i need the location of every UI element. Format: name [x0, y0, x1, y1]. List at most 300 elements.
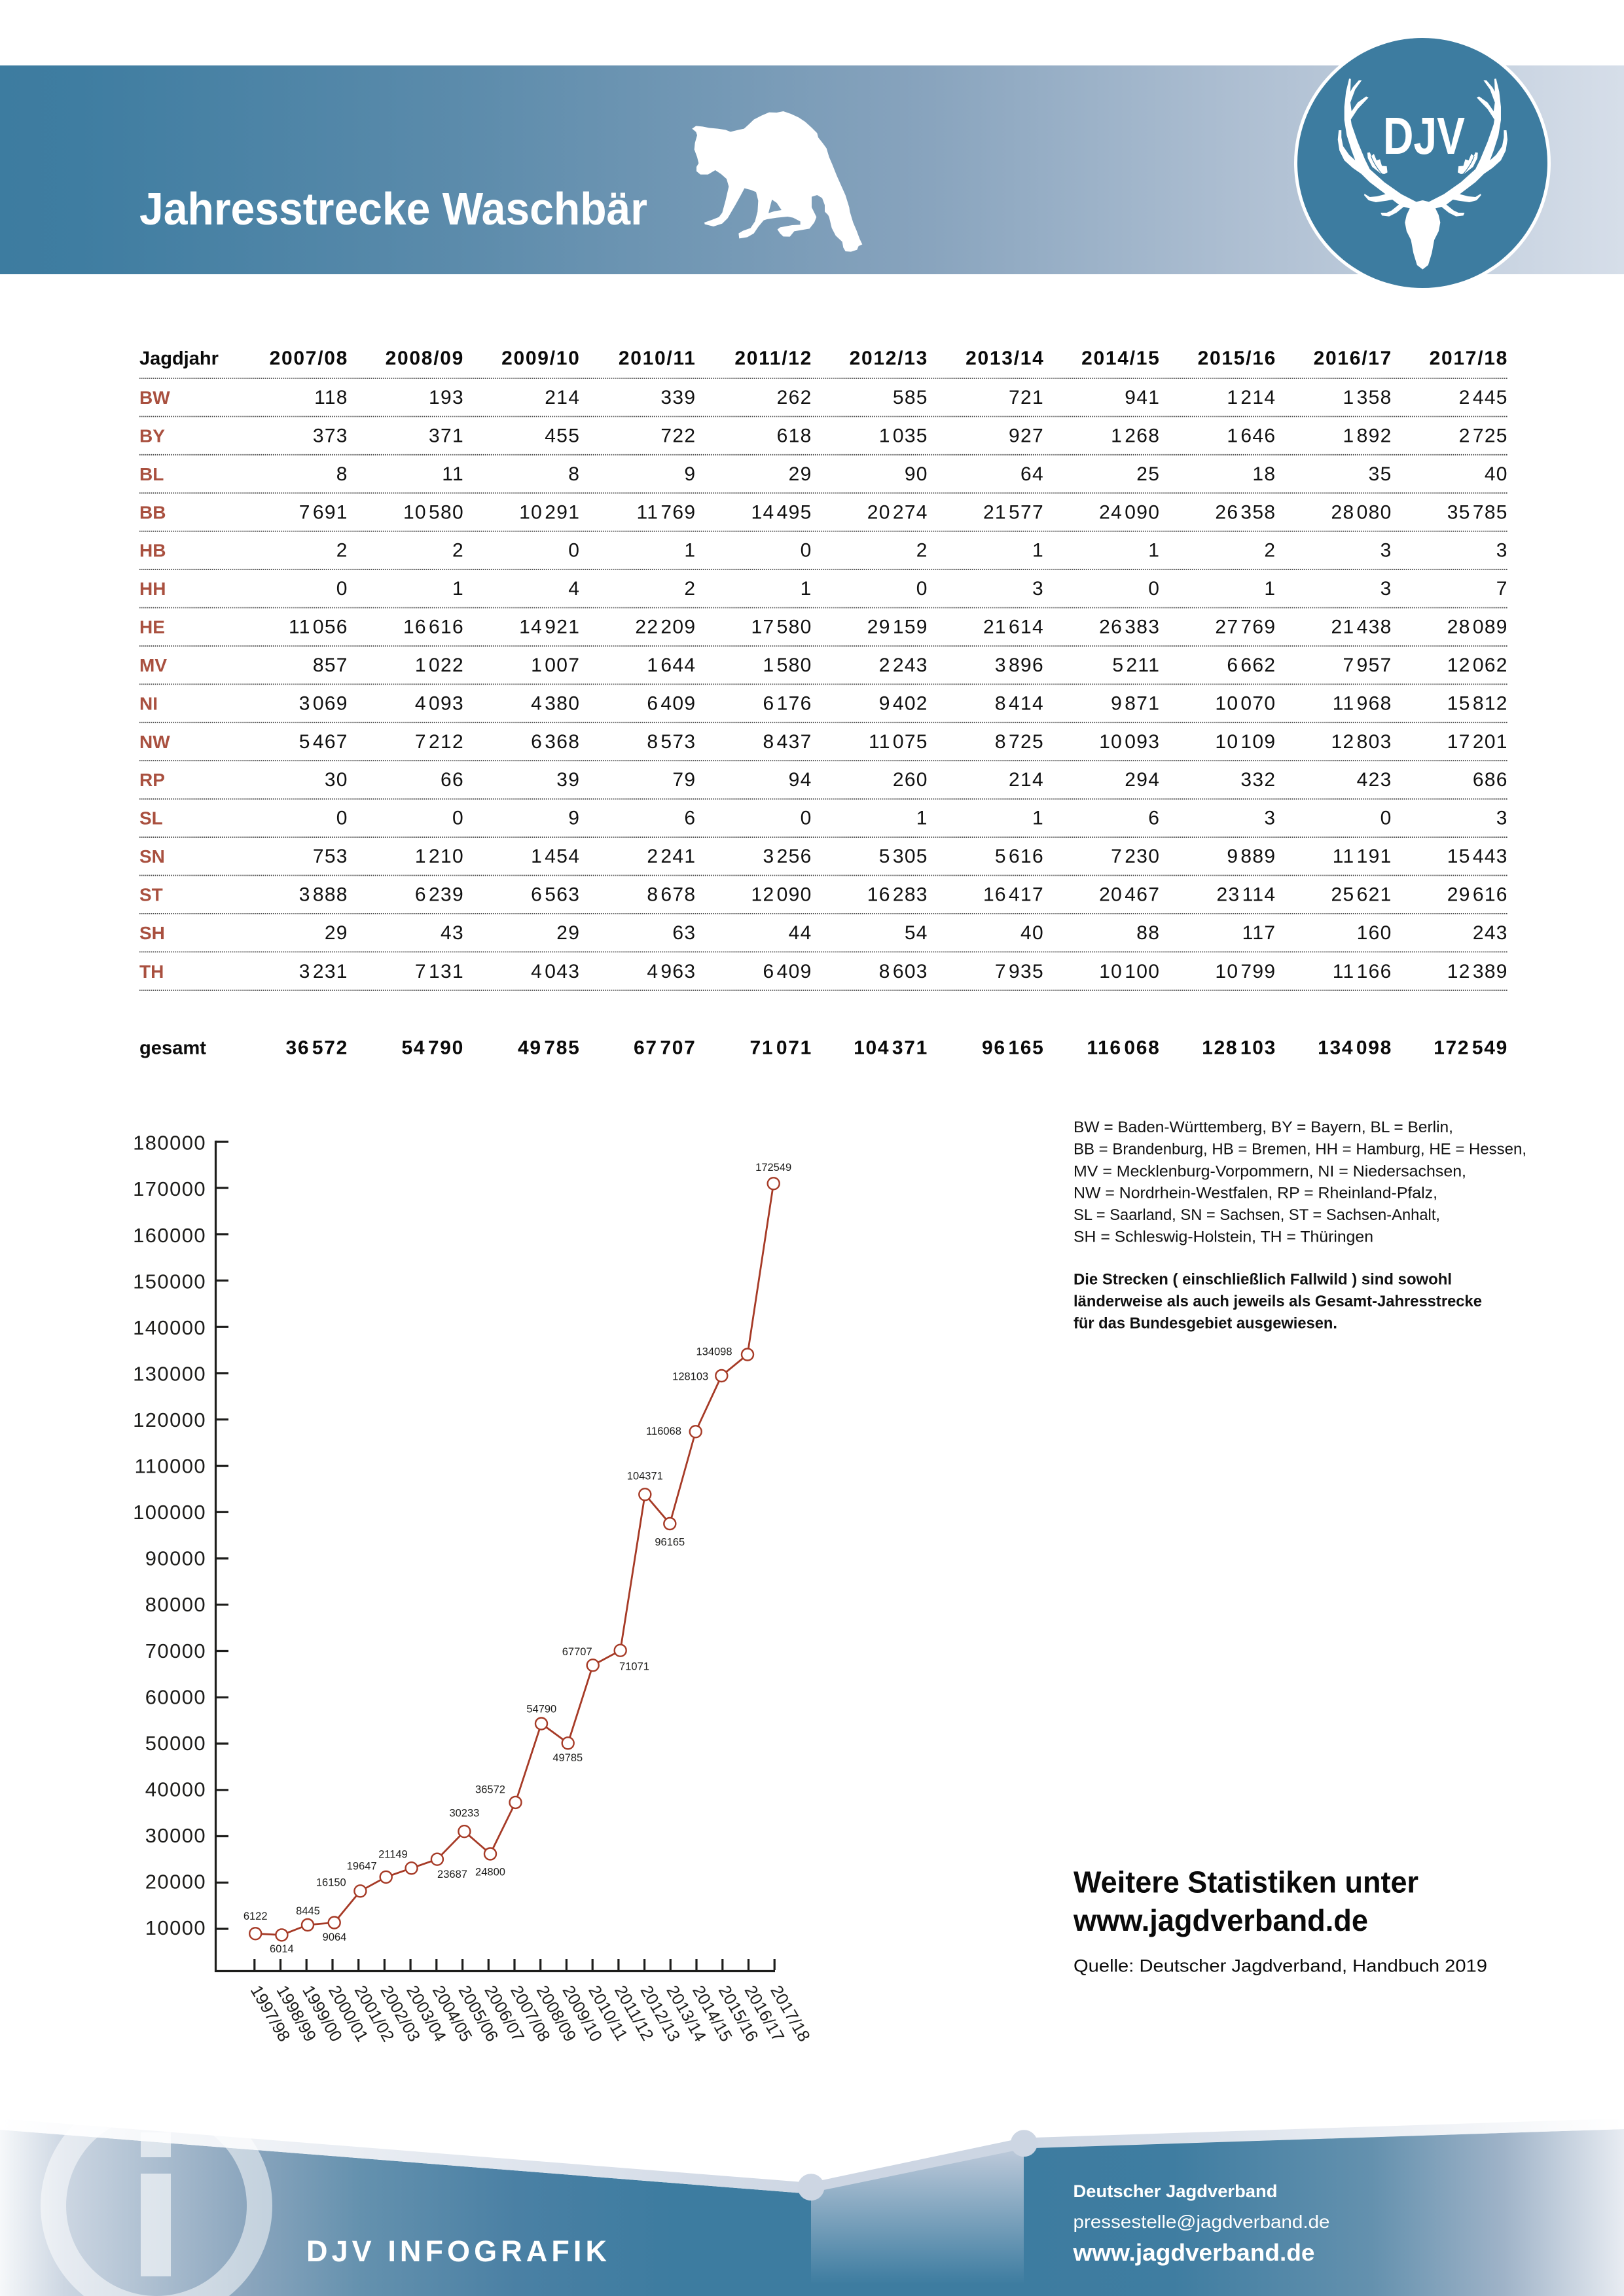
- x axis labels: 2014/15: [689, 1982, 736, 2045]
- contact block: Deutscher Jagdverband: [1074, 2181, 1278, 2201]
- x axis labels: 2011/12: [611, 1982, 658, 2044]
- row BY: BY: [139, 425, 165, 446]
- icon: right antler and head half: [1421, 79, 1507, 270]
- abbreviation legend: BB = Brandenburg, HB = Bremen, HH = Hamburg, HE = Hessen,: [1074, 1140, 1526, 1158]
- row BY: 1 646: [1227, 425, 1276, 446]
- table header row: 2009/10: [501, 348, 580, 369]
- row BY: 455: [545, 425, 580, 446]
- row BW: 262: [777, 387, 812, 408]
- row RP: [139, 769, 1508, 791]
- row NI: 6 176: [763, 692, 812, 714]
- row BB: 24 090: [1099, 501, 1160, 523]
- row MV: 1 007: [531, 655, 580, 676]
- data point value labels: 16150: [316, 1876, 346, 1888]
- abbreviation legend: SH = Schleswig-Holstein, TH = Thüringen: [1074, 1229, 1373, 1246]
- row NI: 6 409: [647, 692, 696, 714]
- table header row: 2008/09: [386, 348, 464, 369]
- row SH: 29: [325, 922, 348, 944]
- data point value labels: 96165: [655, 1536, 685, 1548]
- row TH: 10 100: [1099, 961, 1160, 982]
- y axis labels: 110000: [134, 1455, 206, 1478]
- row HE: 27 769: [1215, 617, 1276, 637]
- row HE: 11 056: [289, 617, 348, 637]
- row HB: [139, 540, 1508, 562]
- row ST: 6 563: [531, 884, 580, 906]
- row BY: 373: [313, 425, 348, 446]
- row BY: 371: [429, 425, 464, 446]
- data point value labels: 49785: [552, 1752, 583, 1764]
- row BW: BW: [139, 387, 170, 408]
- x axis labels: 2000/01: [325, 1982, 372, 2045]
- totals row: 128 103: [1202, 1037, 1276, 1059]
- x axis labels: 2002/03: [376, 1982, 424, 2045]
- row ST: 8 678: [647, 884, 696, 906]
- title: Jahresstrecke Waschbär: [139, 183, 647, 234]
- row NW: NW: [139, 732, 170, 752]
- row HE: 29 159: [867, 617, 928, 637]
- row SL: 1: [916, 808, 928, 829]
- table header row: 2015/16: [1198, 348, 1276, 369]
- row HH: 2: [684, 578, 696, 600]
- row MV: [139, 655, 1508, 676]
- row TH: 6 409: [763, 961, 812, 982]
- row SH: 243: [1473, 922, 1508, 944]
- row MV: MV: [139, 655, 167, 675]
- row ST: 29 616: [1447, 884, 1508, 906]
- row BW: [139, 387, 1508, 408]
- totals row: 54 790: [402, 1037, 464, 1059]
- header banner: [0, 35, 1624, 291]
- row SL: 3: [1264, 808, 1276, 829]
- y axis labels: 30000: [145, 1824, 206, 1847]
- row SH: 43: [441, 922, 464, 944]
- x axis labels: 2003/04: [403, 1982, 450, 2045]
- y axis labels: 180000: [133, 1132, 206, 1155]
- y axis labels: 170000: [133, 1177, 206, 1200]
- row NI: 9 402: [879, 692, 928, 714]
- row NW: 12 803: [1331, 731, 1392, 753]
- icon: info symbol: [54, 2102, 259, 2296]
- row NI: 11 968: [1333, 692, 1392, 714]
- row TH: TH: [139, 961, 164, 982]
- row NW: 10 109: [1215, 731, 1276, 753]
- row BB: 26 358: [1215, 501, 1276, 523]
- further statistics callout: www.jagdverband.de: [1073, 1903, 1368, 1937]
- totals row: gesamt: [139, 1038, 206, 1059]
- methodology note: für das Bundesgebiet ausgewiesen.: [1074, 1314, 1337, 1332]
- row SH: 29: [556, 922, 580, 944]
- row MV: 3 896: [995, 655, 1044, 676]
- row HE: 22 209: [635, 617, 696, 637]
- row TH: 4 043: [531, 961, 580, 982]
- row HH: 7: [1496, 578, 1508, 600]
- data point value labels: 8445: [296, 1905, 320, 1917]
- row TH: 10 799: [1215, 961, 1276, 982]
- row BL: 18: [1252, 463, 1276, 485]
- row RP: 94: [789, 769, 812, 791]
- row BB: 21 577: [983, 501, 1044, 523]
- row NW: 17 201: [1447, 731, 1508, 753]
- totals row: 104 371: [854, 1037, 928, 1059]
- y axis labels: 160000: [133, 1224, 206, 1247]
- row SN: 3 256: [763, 846, 812, 867]
- row SL: [139, 808, 1508, 829]
- logo text: DJV: [1383, 107, 1465, 165]
- row SN: 5 305: [879, 846, 928, 867]
- y axis labels: 20000: [145, 1871, 206, 1893]
- totals row: 67 707: [634, 1037, 696, 1059]
- row RP: RP: [139, 770, 165, 790]
- row BB: 35 785: [1447, 501, 1508, 523]
- methodology note: Die Strecken ( einschließlich Fallwild ) sind sowohl: [1074, 1271, 1452, 1289]
- contact block: [1072, 2181, 1330, 2266]
- data point value labels: 23687: [437, 1869, 467, 1880]
- data points: [249, 1177, 780, 1941]
- row NW: 8 437: [763, 731, 812, 753]
- row BL: [139, 463, 1508, 485]
- row HE: 28 089: [1447, 617, 1508, 637]
- row HE: 26 383: [1099, 617, 1160, 637]
- row SN: [139, 846, 1508, 867]
- row HB: 1: [1032, 540, 1044, 562]
- row RP: 332: [1240, 769, 1276, 791]
- row SH: 54: [905, 922, 928, 944]
- y axis labels: 50000: [145, 1732, 206, 1755]
- row ST: ST: [139, 885, 163, 905]
- row NI: NI: [139, 693, 158, 713]
- row HH: 1: [1264, 578, 1276, 600]
- row HH: 3: [1032, 578, 1044, 600]
- row RP: 66: [441, 769, 464, 791]
- row HE: 16 616: [403, 617, 464, 637]
- row HB: 2: [916, 540, 928, 562]
- row BW: 585: [893, 387, 928, 408]
- row HH: 0: [1148, 578, 1160, 600]
- totals row: 96 165: [982, 1037, 1045, 1059]
- row NW: 5 467: [299, 731, 348, 753]
- row SL: SL: [139, 808, 163, 829]
- DJV logo: [1294, 35, 1551, 291]
- row BW: 1 214: [1227, 387, 1276, 408]
- row BW: 1 358: [1343, 387, 1392, 408]
- y axis labels: 10000: [145, 1916, 206, 1939]
- table header row: 2010/11: [619, 348, 696, 369]
- row BW: 721: [1009, 387, 1044, 408]
- row SL: 6: [684, 808, 696, 829]
- row SN: SN: [139, 846, 165, 867]
- row BB: BB: [139, 502, 166, 522]
- methodology note: [1074, 1271, 1482, 1332]
- row NW: [139, 731, 1508, 753]
- footer band with nodes: [0, 2119, 1624, 2200]
- x axis labels: 1999/00: [298, 1982, 346, 2045]
- x axis labels: 2016/17: [741, 1982, 788, 2045]
- row SN: 2 241: [647, 846, 696, 867]
- row ST: 25 621: [1331, 884, 1392, 906]
- data point value labels: 54790: [526, 1704, 556, 1715]
- x axis labels: [247, 1982, 814, 2045]
- row BB: 7 691: [299, 501, 348, 523]
- x axis labels: 2006/07: [480, 1982, 528, 2045]
- x axis labels: 2007/08: [507, 1982, 554, 2045]
- x axis labels: 2017/18: [767, 1982, 814, 2045]
- data line: [255, 1183, 774, 1935]
- data point value labels: 134098: [696, 1346, 732, 1357]
- row HB: 1: [684, 540, 696, 562]
- row SL: 0: [336, 808, 348, 829]
- totals row: 172 549: [1434, 1037, 1508, 1059]
- row HE: HE: [139, 617, 165, 637]
- row SL: 0: [1380, 808, 1392, 829]
- methodology note: länderweise als auch jeweils als Gesamt-Jahresstrecke: [1074, 1293, 1482, 1310]
- row BL: 90: [905, 463, 928, 485]
- row MV: 1 580: [763, 655, 812, 676]
- row ST: 23 114: [1217, 884, 1276, 906]
- row BY: 1 035: [879, 425, 928, 446]
- totals row: 71 071: [750, 1037, 812, 1059]
- row BB: [139, 501, 1508, 523]
- row BY: 1 892: [1343, 425, 1392, 446]
- row TH: 3 231: [299, 961, 348, 982]
- row NI: 10 070: [1215, 692, 1276, 714]
- row NW: 7 212: [415, 731, 464, 753]
- data point value labels: 104371: [627, 1470, 663, 1482]
- further statistics callout: [1073, 1865, 1487, 1976]
- row ST: 16 283: [867, 884, 928, 906]
- row MV: 5 211: [1112, 655, 1160, 676]
- data point value labels: 6014: [270, 1943, 294, 1955]
- row SH: [139, 922, 1508, 944]
- x axis labels: 2004/05: [429, 1982, 477, 2045]
- row SH: 160: [1357, 922, 1392, 944]
- x axis labels: 2015/16: [715, 1982, 763, 2045]
- row RP: 260: [893, 769, 928, 791]
- row BB: 10 291: [519, 501, 580, 523]
- x axis labels: 2009/10: [558, 1982, 606, 2045]
- row TH: 12 389: [1447, 961, 1508, 982]
- row BY: 1 268: [1111, 425, 1160, 446]
- row BB: 14 495: [751, 501, 812, 523]
- source line: Quelle: Deutscher Jagdverband, Handbuch 2019: [1074, 1956, 1487, 1976]
- row HH: 0: [916, 578, 928, 600]
- abbreviation legend: MV = Mecklenburg-Vorpommern, NI = Niedersachsen,: [1074, 1162, 1466, 1180]
- y axis labels: 70000: [145, 1640, 206, 1662]
- data point value labels: 71071: [619, 1661, 649, 1673]
- row HH: [139, 578, 1508, 600]
- row HH: 1: [801, 578, 812, 600]
- row SN: 5 616: [995, 846, 1044, 867]
- abbreviation legend: NW = Nordrhein-Westfalen, RP = Rheinland-Pfalz,: [1074, 1185, 1437, 1202]
- y axis labels: 120000: [133, 1408, 206, 1431]
- data point value labels: 9064: [323, 1931, 346, 1943]
- row BB: 11 769: [637, 501, 696, 523]
- further statistics callout: Weitere Statistiken unter: [1074, 1865, 1418, 1899]
- totals row: [139, 1037, 1508, 1059]
- row MV: 6 662: [1227, 655, 1276, 676]
- row NW: 10 093: [1099, 731, 1160, 753]
- row HB: 2: [336, 540, 348, 562]
- y axis labels: 90000: [145, 1547, 206, 1570]
- table header row: 2007/08: [270, 348, 348, 369]
- row SH: 88: [1136, 922, 1160, 944]
- row NW: 8 573: [647, 731, 696, 753]
- row NI: 4 093: [415, 692, 464, 714]
- y axis labels: [133, 1132, 206, 1939]
- data point value labels: 30233: [449, 1807, 479, 1819]
- row SN: 9 889: [1227, 846, 1276, 867]
- icon: left antler and head half: [1338, 79, 1424, 270]
- row TH: 11 166: [1333, 961, 1392, 982]
- row BY: [139, 425, 1508, 446]
- row BW: 941: [1125, 387, 1160, 408]
- row ST: 16 417: [983, 884, 1044, 906]
- y axis labels: 60000: [145, 1685, 206, 1708]
- row HB: HB: [139, 541, 166, 561]
- totals row: 116 068: [1087, 1037, 1160, 1059]
- table header row: [139, 348, 1508, 369]
- row TH: 7 131: [415, 961, 464, 982]
- table header row: 2017/18: [1430, 348, 1508, 369]
- row SN: 11 191: [1333, 846, 1392, 867]
- row ST: 6 239: [415, 884, 464, 906]
- table header row: 2014/15: [1081, 348, 1160, 369]
- row RP: 214: [1009, 769, 1044, 791]
- abbreviation legend: BW = Baden-Württemberg, BY = Bayern, BL = Berlin,: [1074, 1119, 1453, 1136]
- row BB: 10 580: [403, 501, 464, 523]
- row RP: 294: [1125, 769, 1160, 791]
- totals row: 36 572: [286, 1037, 348, 1059]
- row BY: 927: [1009, 425, 1044, 446]
- x axis labels: 2005/06: [455, 1982, 503, 2045]
- row BW: 339: [660, 387, 696, 408]
- row NI: 15 812: [1447, 692, 1508, 714]
- row MV: 1 022: [415, 655, 464, 676]
- data point value labels: 67707: [562, 1646, 592, 1658]
- row BB: 28 080: [1331, 501, 1392, 523]
- y axis labels: 80000: [145, 1593, 206, 1616]
- x axis labels: 2010/11: [585, 1982, 632, 2044]
- row SL: 3: [1496, 808, 1508, 829]
- row SN: 1 210: [415, 846, 464, 867]
- row BW: 214: [545, 387, 580, 408]
- row TH: [139, 961, 1508, 982]
- row BL: 64: [1020, 463, 1044, 485]
- row HB: 1: [1148, 540, 1160, 562]
- abbreviation legend: [1074, 1119, 1526, 1246]
- x axis labels: 2013/14: [662, 1982, 710, 2045]
- row HH: 3: [1380, 578, 1392, 600]
- row ST: [139, 884, 1508, 906]
- row HH: 1: [452, 578, 464, 600]
- row RP: 79: [672, 769, 696, 791]
- row HE: [139, 617, 1508, 637]
- row NW: 8 725: [995, 731, 1044, 753]
- data point value labels: [244, 1162, 791, 1955]
- x axis labels: 2012/13: [637, 1982, 685, 2045]
- x axis labels: 2008/09: [533, 1982, 581, 2045]
- row SN: 753: [313, 846, 348, 867]
- row SL: 6: [1148, 808, 1160, 829]
- data point value labels: 21149: [378, 1849, 408, 1861]
- row MV: 2 243: [879, 655, 928, 676]
- contact block: www.jagdverband.de: [1072, 2239, 1314, 2266]
- data point value labels: 172549: [755, 1162, 791, 1174]
- x axis labels: 2001/02: [351, 1982, 399, 2045]
- row BW: 193: [429, 387, 464, 408]
- row MV: 12 062: [1447, 655, 1508, 676]
- row NW: 11 075: [869, 731, 928, 753]
- icon: raccoon silhouette: [692, 111, 862, 252]
- abbreviation legend: SL = Saarland, SN = Sachsen, ST = Sachsen-Anhalt,: [1074, 1206, 1440, 1224]
- row SN: 7 230: [1111, 846, 1160, 867]
- row SH: 117: [1242, 922, 1276, 944]
- data point value labels: 36572: [475, 1784, 505, 1795]
- data point value labels: 128103: [672, 1371, 708, 1382]
- y axis labels: 140000: [133, 1316, 206, 1339]
- row ST: 3 888: [299, 884, 348, 906]
- row BY: 722: [660, 425, 696, 446]
- row BL: 25: [1136, 463, 1160, 485]
- row BY: 2 725: [1459, 425, 1508, 446]
- row NI: [139, 692, 1508, 714]
- row HB: 0: [568, 540, 580, 562]
- row SL: 1: [1032, 808, 1044, 829]
- row ST: 12 090: [751, 884, 812, 906]
- row BL: 35: [1369, 463, 1392, 485]
- row SL: 0: [452, 808, 464, 829]
- row BY: 618: [777, 425, 812, 446]
- row BL: 29: [789, 463, 812, 485]
- y axis labels: 40000: [145, 1778, 206, 1801]
- row HE: 21 614: [983, 617, 1044, 637]
- data table: [139, 348, 1508, 1059]
- row MV: 857: [313, 655, 348, 676]
- data point value labels: 19647: [347, 1860, 377, 1872]
- table header row: 2016/17: [1314, 348, 1392, 369]
- row HB: 0: [801, 540, 812, 562]
- row SH: SH: [139, 923, 165, 943]
- row BL: 9: [684, 463, 696, 485]
- row SL: 9: [568, 808, 580, 829]
- footer: [0, 2102, 1624, 2296]
- totals row: 49 785: [518, 1037, 580, 1059]
- row BL: 8: [568, 463, 580, 485]
- x axis labels: 1997/98: [247, 1982, 295, 2045]
- chart axes and ticks: [216, 1141, 775, 1971]
- row HH: 4: [568, 578, 580, 600]
- row HE: 17 580: [751, 617, 812, 637]
- line chart: yearly totals: [133, 1132, 814, 2045]
- row BW: 118: [314, 387, 348, 408]
- row MV: 7 957: [1343, 655, 1392, 676]
- row SL: 0: [801, 808, 812, 829]
- row HH: 0: [336, 578, 348, 600]
- x axis labels: 1998/99: [273, 1982, 320, 2045]
- row SN: 1 454: [531, 846, 580, 867]
- row TH: 8 603: [879, 961, 928, 982]
- row SN: 15 443: [1447, 846, 1508, 867]
- row HB: 2: [1264, 540, 1276, 562]
- row TH: 4 963: [647, 961, 696, 982]
- row NI: 3 069: [299, 692, 348, 714]
- row SH: 40: [1020, 922, 1044, 944]
- row HE: 14 921: [519, 617, 580, 637]
- row BB: 20 274: [867, 501, 928, 523]
- row BL: 40: [1485, 463, 1508, 485]
- y axis labels: 150000: [133, 1270, 206, 1293]
- row RP: 39: [556, 769, 580, 791]
- row RP: 686: [1473, 769, 1508, 791]
